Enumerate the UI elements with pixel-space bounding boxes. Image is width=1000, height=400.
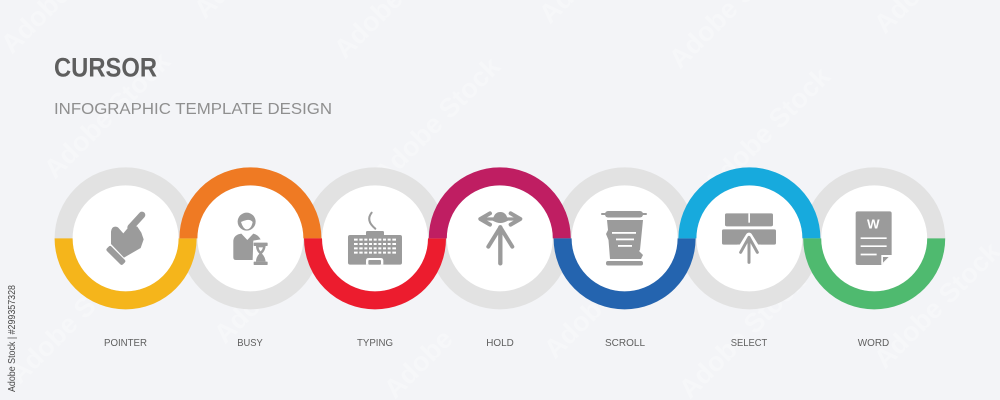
label: hold: HOLD — [486, 338, 514, 349]
labels — [104, 338, 889, 349]
infographic canvas: Adobe Stock — [698, 61, 837, 199]
icon: word document — [856, 211, 892, 265]
ring: typing, red lower half — [313, 238, 437, 300]
infographic canvas: Adobe Stock — [3, 251, 142, 389]
grey background rings — [64, 176, 936, 300]
icon: keyboard with cable — [348, 213, 402, 265]
ring: word, green lower half — [812, 238, 936, 300]
icon: hold arrows — [480, 212, 520, 263]
ring: pointer, yellow lower half — [64, 238, 188, 300]
infographic canvas: Adobe Stock — [208, 211, 347, 349]
label: typing: TYPING — [357, 338, 393, 349]
icon: pointing hand — [106, 215, 144, 266]
coloured half rings — [64, 176, 936, 300]
ring: hold, magenta upper half — [438, 176, 562, 238]
ring: scroll, blue lower half — [563, 238, 687, 300]
infographic canvas: Adobe Stock — [368, 51, 507, 189]
icon: person with hourglass — [233, 213, 268, 265]
infographic canvas: Adobe Stock — [38, 46, 177, 184]
ring: busy, orange upper half — [188, 176, 312, 238]
subtitle: INFOGRAPHIC TEMPLATE DESIGN — [54, 101, 332, 118]
title: CURSOR — [54, 52, 157, 82]
credit: vertical stock id: Adobe Stock | #299357328 — [7, 285, 18, 392]
label: select: SELECT — [731, 338, 768, 349]
infographic canvas: Adobe Stock — [538, 226, 677, 364]
label: pointer: POINTER — [104, 338, 147, 349]
icon: paper scroll — [601, 211, 647, 266]
label: scroll: SCROLL — [605, 338, 645, 349]
label: busy: BUSY — [237, 338, 263, 349]
ring: select, cyan upper half — [687, 176, 811, 238]
label: word: WORD — [858, 338, 889, 349]
icon: select blocks with arrow — [722, 213, 776, 262]
icon: word document: W — [867, 217, 880, 232]
